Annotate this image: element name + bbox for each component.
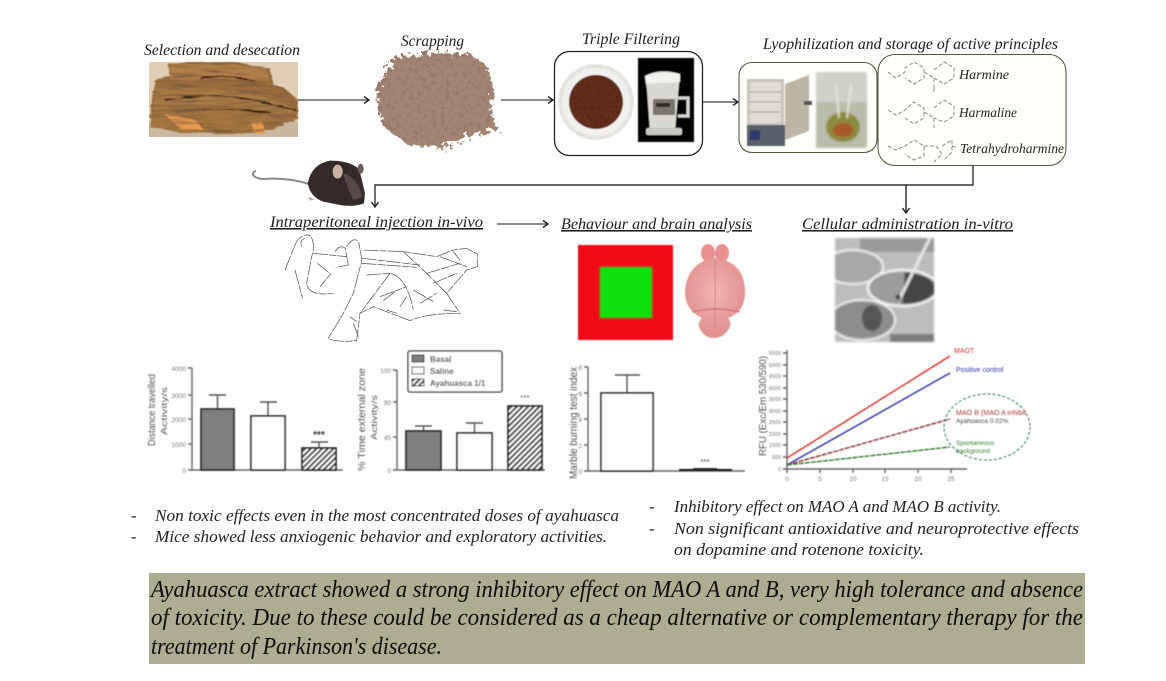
chart: open field arena bbox=[578, 245, 673, 340]
chart: MAO activity lines: Positive control bbox=[956, 367, 1004, 374]
photo: coffee filter bbox=[560, 66, 632, 138]
panel: triple filtering bbox=[554, 52, 702, 156]
structure: harmine: Harmine bbox=[958, 68, 1009, 83]
chart: marble burning test: 8 bbox=[578, 365, 582, 372]
text block: in-vivo findings: - bbox=[131, 506, 136, 525]
structure: harmine bbox=[888, 62, 1009, 94]
chart: marble burning test: 4 bbox=[578, 417, 582, 424]
chart: MAO activity lines: 3500 bbox=[769, 397, 781, 403]
chart: marble burning test: *** bbox=[700, 458, 710, 467]
text block: in-vivo findings: Non toxic effects even in the most concentrated doses of ayahuasca bbox=[154, 506, 619, 525]
arrow: filter to lyophilization bbox=[703, 101, 738, 103]
chart: marble burning test: 2 bbox=[578, 443, 582, 450]
photo: cell culture well plate bbox=[823, 238, 938, 342]
arrow: bark to powder bbox=[298, 99, 369, 101]
chart: MAO activity lines bbox=[758, 348, 1030, 483]
chart: MAO activity lines: 500 bbox=[772, 455, 781, 461]
chart: MAO activity lines: 2000 bbox=[769, 432, 781, 438]
photo: freezer bbox=[747, 75, 812, 146]
chart: MAO activity lines: 5500 bbox=[769, 351, 781, 357]
chart: time in external zone: 90 bbox=[384, 400, 391, 407]
legend: Basal bbox=[430, 355, 451, 364]
chart: MAO activity lines: background bbox=[956, 448, 990, 455]
chart: distance travelled: 3000 bbox=[172, 393, 186, 400]
text block: in-vitro findings: Inhibitory effect on MAO A and MAO B activity. bbox=[673, 497, 1001, 516]
chart: MAO activity lines: 1500 bbox=[769, 443, 781, 449]
text block: in-vitro findings: on dopamine and rotenone toxicity. bbox=[674, 540, 924, 559]
y axis title: Distance travelled bbox=[147, 374, 158, 446]
chart: MAO activity lines: 4000 bbox=[769, 386, 781, 392]
chart: distance travelled: 0 bbox=[182, 468, 186, 475]
structure: harmaline: Harmaline bbox=[958, 106, 1017, 121]
chart: marble burning test: Marble burning test index bbox=[568, 367, 580, 479]
arrow: split line to in-vitro bbox=[905, 185, 907, 213]
icon: mouse bbox=[253, 161, 365, 206]
chart: MAO activity lines: Ayahuasca 0.02% bbox=[956, 418, 1008, 425]
panel: lyophilization bbox=[739, 62, 877, 152]
chart: MAO activity lines: 10 bbox=[849, 476, 857, 483]
photo: brain bbox=[685, 244, 745, 338]
chart: time in external zone bbox=[357, 351, 545, 475]
heading: scrapping: Scrapping bbox=[401, 33, 464, 50]
text block: in-vitro findings: - bbox=[649, 519, 654, 538]
legend: Ayahuasca 1/1 bbox=[430, 379, 486, 388]
chart: marble burning test: 0 bbox=[578, 469, 582, 476]
chart: marble burning test bbox=[568, 365, 745, 479]
chart: MAO activity lines: 0 bbox=[785, 476, 789, 483]
chart: distance travelled: 1000 bbox=[172, 442, 186, 449]
chart: MAO activity lines: 15 bbox=[881, 476, 889, 483]
chart: MAO activity lines: 20 bbox=[914, 476, 922, 483]
heading: selection and desecation: Selection and desecation bbox=[144, 42, 300, 59]
conclusion text: treatment of Parkinson's disease. bbox=[151, 634, 442, 660]
chart: time in external zone: Activity/s bbox=[370, 395, 379, 440]
text block: in-vitro findings: - bbox=[649, 497, 654, 516]
text block: in-vivo findings: - bbox=[131, 527, 136, 546]
text block: in-vitro findings: Non significant antioxidative and neuroprotective effects bbox=[673, 519, 1079, 538]
arrow: split line from active principles to in-vivo bbox=[375, 165, 973, 207]
chart: time in external zone: 100 bbox=[380, 368, 391, 375]
heading: behaviour and brain analysis: Behaviour and brain analysis bbox=[561, 216, 752, 233]
photo: extract tube bbox=[816, 72, 867, 148]
chart: MAO activity lines: MAOT bbox=[954, 348, 975, 355]
chart: MAO activity lines: 4500 bbox=[769, 374, 781, 380]
chart: distance travelled: 4000 bbox=[172, 366, 186, 373]
chart: MAO activity lines: 25 bbox=[947, 476, 955, 483]
chart: MAO activity lines: Spontaneous bbox=[956, 440, 995, 447]
structure: tetrahydroharmine: Tetrahydroharmine bbox=[960, 142, 1064, 157]
photo: coffee maker bbox=[638, 58, 694, 142]
legend: Saline bbox=[430, 367, 454, 376]
panel: active principles bbox=[878, 54, 1066, 166]
chart: distance travelled: Activity/s bbox=[160, 387, 169, 435]
chart: MAO activity lines: 0 bbox=[778, 467, 781, 473]
text block: in-vitro findings bbox=[649, 497, 1079, 559]
chart: distance travelled: *** bbox=[313, 430, 325, 441]
chart: MAO activity lines: 2500 bbox=[769, 420, 781, 426]
conclusion text bbox=[149, 577, 1083, 660]
chart: time in external zone: % Time external zone bbox=[357, 368, 368, 471]
heading: triple filtering: Triple Filtering bbox=[582, 31, 680, 48]
illustration: injection sketch bbox=[285, 235, 477, 341]
chart: distance travelled bbox=[147, 366, 343, 475]
chart: marble burning test: 6 bbox=[578, 391, 582, 398]
chart: time in external zone: *** bbox=[520, 394, 530, 403]
photo: dried bark bbox=[149, 62, 298, 137]
arrow: powder to filter bbox=[501, 99, 553, 101]
conclusion text: Ayahuasca extract showed a strong inhibitory effect on MAO A and B, very high tolerance and absence bbox=[149, 577, 1083, 603]
legend bbox=[408, 351, 502, 392]
chart: MAO activity lines: 5000 bbox=[769, 363, 781, 369]
heading: cellular administration: Cellular administration in-vitro bbox=[802, 216, 1013, 233]
chart: MAO activity lines: 3000 bbox=[769, 409, 781, 415]
chart: distance travelled: 2000 bbox=[172, 417, 186, 424]
arrow: injection to behaviour bbox=[497, 223, 548, 225]
structure: tetrahydroharmine bbox=[888, 140, 1064, 162]
chart: time in external zone: 0 bbox=[387, 468, 391, 475]
structure: harmaline bbox=[888, 100, 1017, 128]
chart: MAO activity lines: RFU (Exc/Em 530/590) bbox=[758, 356, 769, 456]
chart: time in external zone: 45 bbox=[384, 435, 391, 442]
heading: intraperitoneal injection: Intraperitoneal injection in-vivo bbox=[269, 214, 483, 231]
conclusion text: of toxicity. Due to these could be considered as a cheap alternative or complementary therapy for the bbox=[151, 605, 1083, 631]
photo: bark powder pile bbox=[375, 52, 497, 148]
chart: MAO activity lines: MAO B (MAO A inhibit. bbox=[956, 410, 1028, 417]
heading: lyophilization and storage: Lyophilization and storage of active principles bbox=[762, 36, 1058, 53]
panel: conclusion bbox=[149, 573, 1085, 664]
chart: MAO activity lines: 5 bbox=[818, 476, 822, 483]
text block: in-vivo findings bbox=[131, 506, 619, 546]
text block: in-vivo findings: Mice showed less anxiogenic behavior and exploratory activities. bbox=[154, 527, 607, 546]
